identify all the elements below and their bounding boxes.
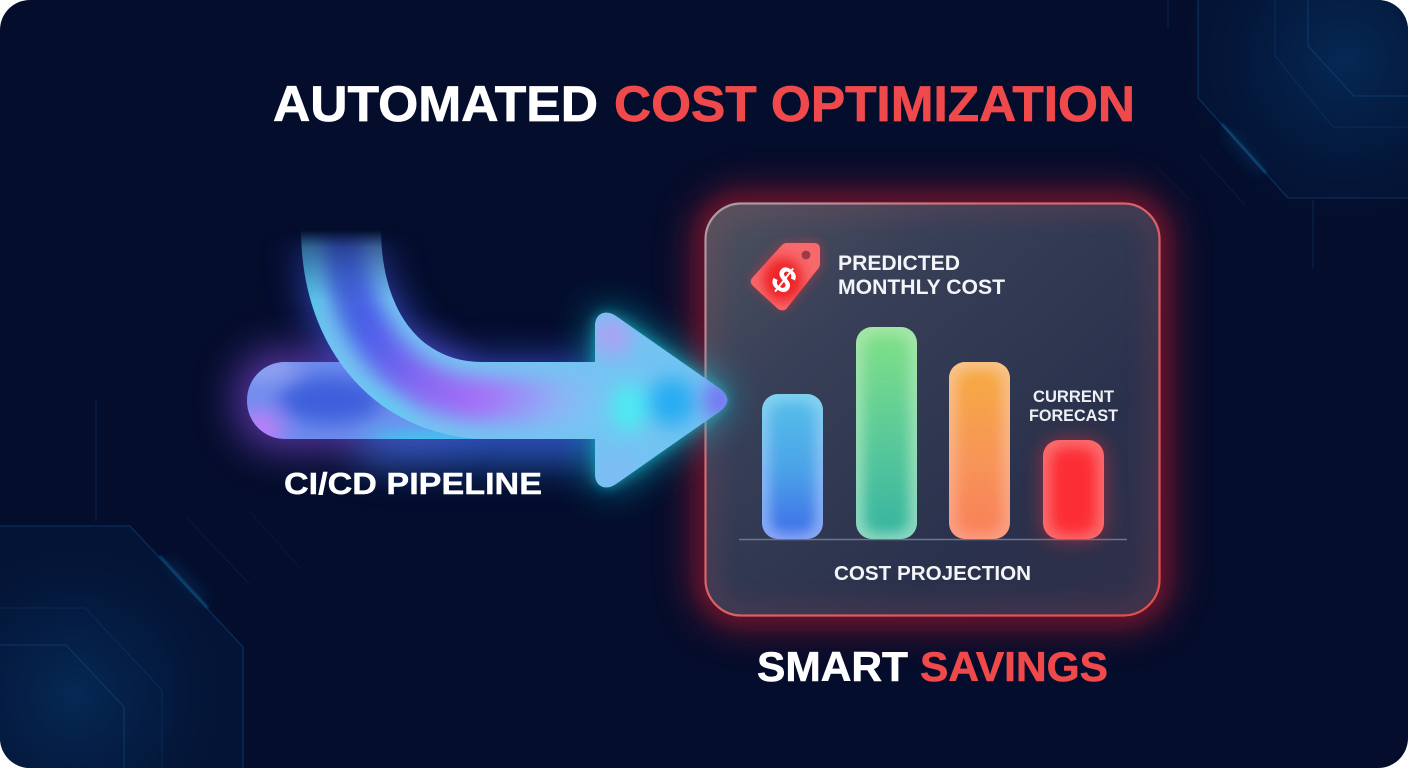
label: cost projection: COST PROJECTION (834, 562, 1031, 585)
arrow: CI/CD pipeline merge (232, 215, 736, 487)
bar: orange (949, 362, 1010, 539)
bar chart (739, 327, 1127, 540)
arrow: horizontal tail (247, 362, 478, 439)
label: smart savings: SAVINGS (920, 643, 1108, 690)
heading: predicted monthly cost (839, 256, 1005, 294)
bar: red current forecast (1043, 440, 1104, 539)
label: smart savings (758, 652, 1107, 682)
panel: cost projection (705, 203, 1160, 616)
arrow glow (235, 228, 727, 487)
background circuit: bottom left (0, 400, 300, 768)
heading: predicted monthly cost: MONTHLY COST (838, 276, 1005, 299)
label: smart savings: SMART (757, 643, 908, 690)
arrow: curved body and head (297, 215, 736, 487)
icon: price tag (751, 243, 820, 310)
panel body (706, 204, 1160, 616)
label: current forecast (1030, 390, 1118, 421)
label: CI/CD pipeline: CI/CD PIPELINE (284, 466, 542, 501)
label: current forecast: FORECAST (1029, 407, 1118, 425)
label: current forecast: CURRENT (1033, 388, 1114, 406)
icon: price tag: $ (764, 257, 805, 302)
bar: blue (762, 394, 823, 539)
title (274, 86, 1132, 122)
heading: predicted monthly cost: PREDICTED (838, 252, 960, 275)
panel glow (705, 203, 1160, 616)
title: AUTOMATED (273, 76, 598, 132)
title: COST OPTIMIZATION (614, 76, 1135, 132)
baseline (739, 538, 1127, 540)
bar: green (856, 327, 917, 539)
background circuit: top right (1150, 0, 1408, 268)
